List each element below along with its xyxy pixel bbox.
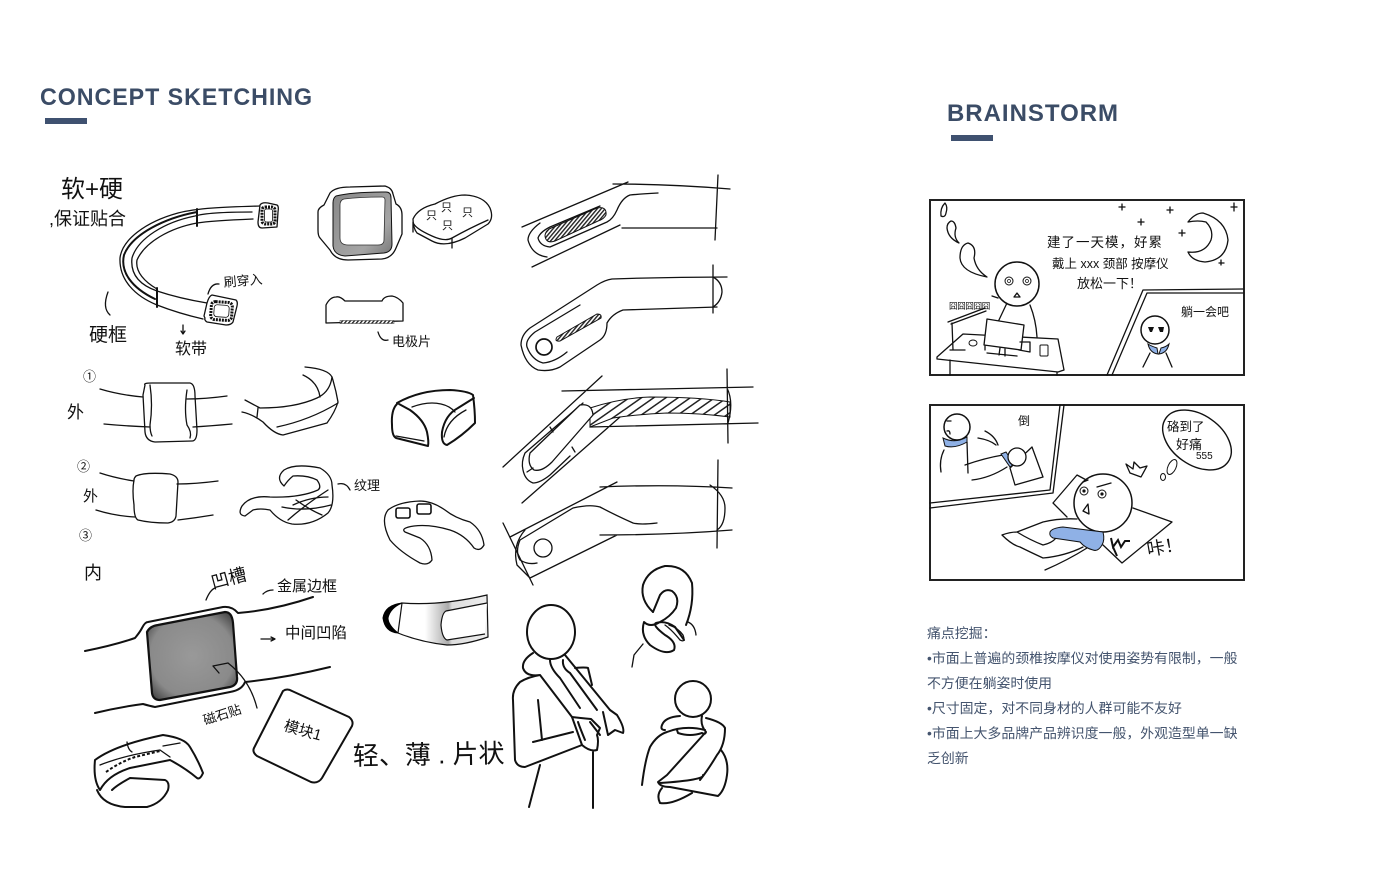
- sketch: twisted band with texture: [240, 466, 380, 524]
- sketch: band option 1: 外: [67, 403, 84, 422]
- sketch: soft and hard headband: 软+硬: [61, 176, 123, 203]
- figure lying with neck pain: 咔！: [1145, 534, 1184, 560]
- sketch: soft and hard headband: 刷穿入: [223, 272, 263, 290]
- sketch: module side view with electrode: 电极片: [392, 334, 431, 349]
- text block: pain points: •市面上普遍的颈椎按摩仪对使用姿势有限制，一般: [927, 650, 1238, 666]
- text block: pain points: •市面上大多品牌产品辨识度一般，外观造型单一缺: [927, 725, 1238, 741]
- sketch: band option 1: [67, 369, 232, 442]
- inset: person falling onto pillow: [930, 405, 1064, 508]
- heading: concept sketching: CONCEPT SKETCHING: [40, 84, 313, 111]
- sketch: module side view with electrode: [326, 296, 431, 349]
- sketch: watch frame front view: [318, 186, 402, 260]
- icon: moon and stars: [1119, 203, 1237, 265]
- sketch: side band A: [522, 175, 730, 267]
- sketch: band option 2: ②: [77, 459, 90, 474]
- sketch: rounded module: 模块1: [282, 718, 323, 744]
- inset: person resting: [1107, 289, 1243, 375]
- sketch: twisted band with texture: 纹理: [354, 478, 380, 493]
- sketch: band option 1: ①: [83, 369, 96, 384]
- sketch: soft and hard headband: 硬框: [89, 324, 127, 346]
- sketch: side band C: [503, 369, 758, 503]
- speech text: 建了一天模，好累: [1047, 235, 1163, 250]
- text block: pain points: •尺寸固定，对不同身材的人群可能不友好: [927, 700, 1182, 716]
- figure at desk: [937, 262, 1064, 375]
- sketch: side band D: [503, 460, 732, 585]
- sketch: wrapped bracelet: [95, 735, 203, 807]
- text block: pain points: 乏创新: [927, 750, 969, 766]
- sketch: neck pillow: [632, 566, 696, 667]
- thought bubble: 555: [1196, 451, 1213, 462]
- icon: ghosts: [941, 203, 987, 277]
- sketch: inner view with recess: 内: [84, 563, 102, 583]
- thought bubble: [1152, 398, 1242, 482]
- sketch: curved loop module: [384, 501, 484, 564]
- sketch: inner view with recess: 凹槽: [209, 564, 249, 593]
- inset: person resting: 躺一会吧: [1181, 304, 1229, 319]
- panel: storyboard frame one: [930, 200, 1244, 375]
- icon: crown: [1126, 462, 1147, 477]
- sketch: curved band 1: [242, 367, 338, 435]
- thought bubble: 硌到了: [1167, 420, 1205, 434]
- panel: storyboard frame two: [930, 398, 1244, 580]
- speech text: 戴上 xxx 颈部 按摩仪: [1052, 256, 1169, 271]
- sketch: soft and hard headband: 软带: [175, 340, 207, 358]
- sketch: inner view with recess: [84, 563, 347, 728]
- sketch: electrode pad: 只: [426, 210, 437, 222]
- sketch: band option 2: [77, 459, 218, 543]
- text block: pain points: 不方便在躺姿时使用: [927, 675, 1052, 691]
- sketch: electrode pad: 只: [441, 202, 452, 214]
- sketch: inner view with recess: 磁石贴: [201, 702, 243, 728]
- sketch note: light thin sheet: 轻、薄 . 片状: [353, 738, 505, 771]
- sketch: soft and hard headband: ,保证贴合: [49, 209, 126, 229]
- sketch: person wearing device standing: [513, 605, 623, 808]
- sketch: rounded module: [253, 690, 353, 782]
- sketch: electrode pad: 只: [462, 207, 473, 219]
- heading: concept sketching: [40, 84, 313, 124]
- inset: person falling onto pillow: 倒: [1018, 414, 1030, 428]
- thought bubble: 好痛: [1176, 437, 1202, 452]
- sketch: electrode pad: [413, 195, 492, 248]
- text block: pain points: 痛点挖掘：: [927, 625, 996, 641]
- heading: brainstorm: [947, 100, 1119, 141]
- sketch: person wearing device sitting: [642, 681, 727, 803]
- sketch: inner view with recess: 金属边框: [277, 578, 337, 595]
- sketch: band option 2: 外: [83, 488, 98, 505]
- figure lying with neck pain: [1002, 474, 1184, 570]
- sketch: electrode pad: 只: [442, 220, 453, 232]
- speech text: 放松一下！: [1077, 276, 1142, 291]
- sketch: side band B: [521, 265, 727, 371]
- sketch: band option 2: ③: [79, 528, 92, 543]
- sketch: c-shaped band: [392, 390, 475, 446]
- heading: brainstorm: BRAINSTORM: [947, 100, 1119, 127]
- figure at desk: 囧囧囧囧囧: [949, 301, 990, 311]
- sketch: band with gradient shading: [383, 595, 488, 645]
- sketch: inner view with recess: 中间凹陷: [285, 624, 347, 642]
- speech text: [1047, 235, 1169, 291]
- sketch: soft and hard headband: [49, 176, 278, 358]
- text block: pain points: [927, 625, 1238, 766]
